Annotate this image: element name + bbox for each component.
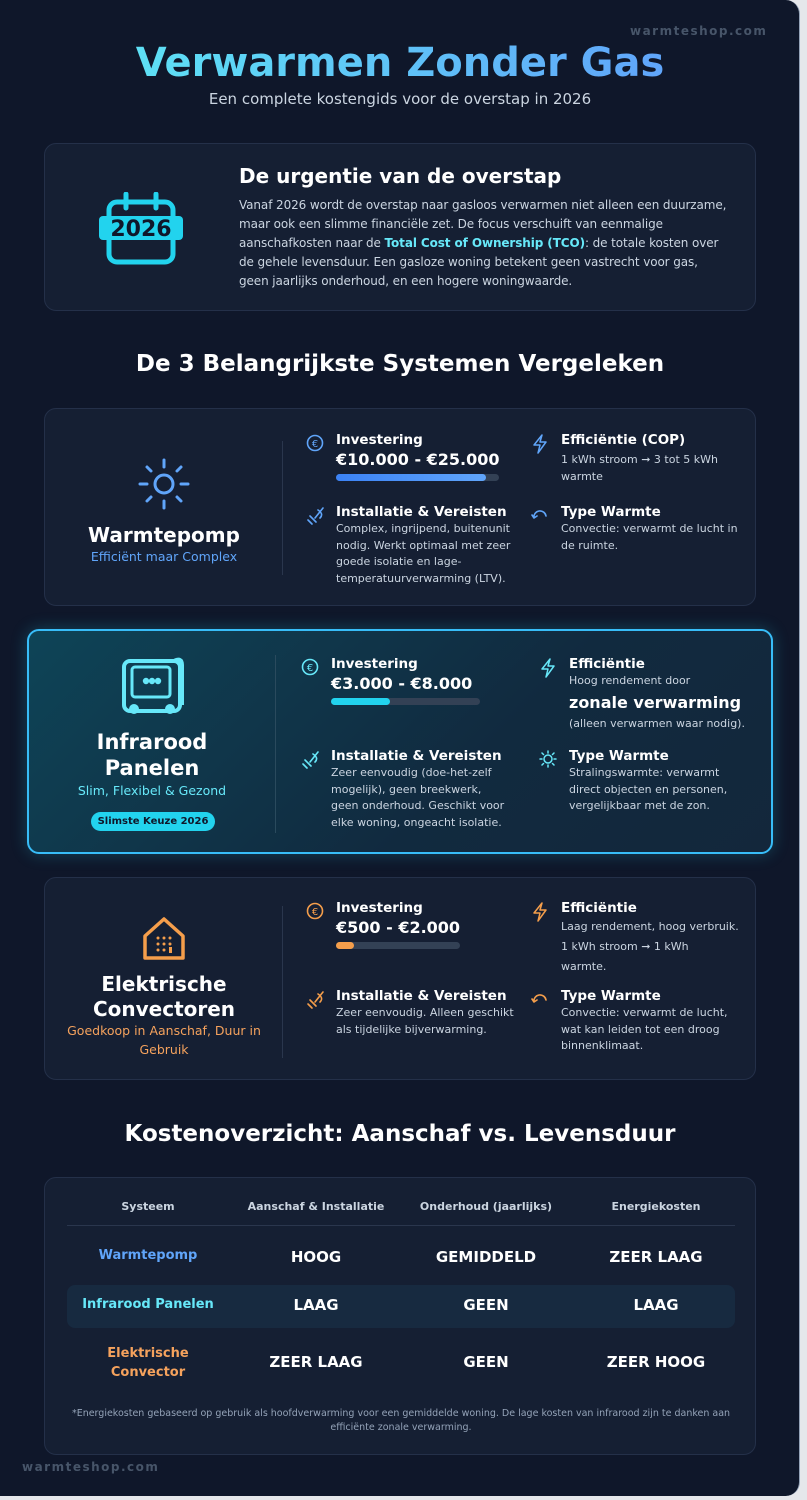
row: warmtepomp: ZEER LAAG: [609, 1248, 703, 1266]
panel: cost table: [44, 1177, 756, 1455]
panel: infrarood panelen (highlight): Stralingswarmte: verwarmt: [569, 766, 719, 779]
row: infrarood (highlight): Infrarood Panelen: [82, 1297, 214, 1312]
panel: infrarood panelen (highlight): Hoog rendement door: [569, 674, 690, 687]
row: warmtepomp: Warmtepomp: [99, 1248, 197, 1263]
panel: elektrische convectoren: als tijdelijke bijverwarming.: [336, 1022, 487, 1036]
row: infrarood (highlight): LAAG: [633, 1296, 679, 1314]
table header: Energiekosten: [611, 1200, 700, 1213]
section heading: systems: De 3 Belangrijkste Systemen Vergeleken: [136, 351, 664, 377]
panel: elektrische convectoren: 1 kWh stroom ➞ 1 kWh: [561, 940, 689, 953]
panel: infrarood panelen (highlight): Efficiëntie: [569, 656, 645, 672]
footnote: *Energiekosten gebaseerd op gebruik als hoofdverwarming voor een gemiddelde woning. De lage kosten van infrarood zijn te danken aan efficiënte zonale verwarming.: [72, 1408, 730, 1433]
watermark bottom: warmteshop.com: [22, 1460, 159, 1474]
item: investering: [306, 432, 500, 481]
panel: infrarood panelen (highlight): Type Warmte: [569, 748, 669, 764]
title: Verwarmen Zonder Gas: [136, 40, 664, 86]
badge: Slimste Keuze 2026: [98, 816, 208, 827]
table header: Systeem: [121, 1200, 175, 1213]
name: [93, 972, 235, 1021]
panel: warmtepomp: Investering: [336, 432, 423, 448]
panel: warmtepomp: €: [312, 439, 318, 450]
row: infrarood (highlight): [67, 1285, 735, 1328]
panel: infrarood panelen (highlight): Installatie & Vereisten: [331, 748, 502, 764]
panel: infrarood panelen (highlight): €: [307, 663, 313, 674]
panel: infrarood panelen (highlight): (alleen verwarmen waar nodig).: [569, 716, 745, 730]
item: type warmte: [531, 504, 738, 552]
icon: calendar 2026: 2026: [110, 217, 172, 242]
panel: warmtepomp: temperatuurverwarming (LTV).: [336, 572, 506, 584]
panel: infrarood panelen (highlight): vergelijkbaar met de zon.: [569, 799, 710, 812]
panel: elektrische convectoren: Investering: [336, 900, 423, 916]
row: convector: ZEER LAAG: [269, 1353, 363, 1371]
panel: infrarood panelen (highlight): elke woning, ongeacht isolatie.: [331, 816, 502, 828]
panel: urgency intro: [44, 143, 756, 311]
row: convector: Elektrische: [107, 1346, 189, 1361]
panel: elektrische convectoren: Convectie: verwarmt de lucht,: [561, 1006, 728, 1019]
watermark top: warmteshop.com: [630, 24, 767, 38]
table header: Aanschaf & Installatie: [248, 1200, 384, 1213]
panel: warmtepomp: Convectie: verwarmt de lucht in: [561, 522, 738, 535]
body text: Vanaf 2026 wordt de overstap naar gasloos verwarmen niet alleen een duurzame, maar ook een slimme financiële zet. De focus verschuift van eenmalige aanschafkosten naar de Total Cost of Ownership (TCO): de totale kosten over de gehele levensduur. Een gasloze woning betekent geen vastrecht voor gas, geen jaarlijks onderhoud, en een hogere woningwaarde.: [239, 198, 726, 288]
panel: infrarood panelen (highlight): direct objecten en personen,: [569, 782, 727, 796]
panel: warmtepomp: goede isolatie en lage-: [336, 555, 461, 568]
panel: elektrische convectoren: warmte.: [561, 960, 606, 973]
row: warmtepomp: [99, 1248, 703, 1266]
tagline: Slim, Flexibel & Gezond: [78, 783, 226, 798]
item: installatie: [307, 988, 514, 1036]
icon: calendar 2026: [99, 192, 183, 264]
panel: warmtepomp: [44, 408, 756, 606]
panel: elektrische convectoren: Type Warmte: [561, 988, 661, 1004]
panel: elektrische convectoren: €: [312, 907, 318, 918]
panel: elektrische convectoren: Installatie & Vereisten: [336, 988, 507, 1004]
table header: [121, 1200, 700, 1213]
row: warmtepomp: HOOG: [291, 1248, 341, 1266]
name: Infrarood: [97, 730, 207, 754]
panel: elektrische convectoren: €500 - €2.000: [336, 918, 460, 937]
item: investering: [302, 656, 480, 705]
panel: warmtepomp: €10.000 - €25.000: [336, 450, 500, 469]
item: type warmte: [531, 988, 728, 1052]
panel: infrarood panelen (highlight): €3.000 - €8.000: [331, 674, 472, 693]
panel: elektrische convectoren: binnenklimaat.: [561, 1039, 643, 1052]
panel: elektrische convectoren: Efficiëntie: [561, 900, 637, 916]
panel: warmtepomp: 1 kWh stroom ➞ 3 tot 5 kWh: [561, 453, 718, 466]
panel: elektrische convectoren: wat kan leiden tot een droog: [561, 1022, 720, 1036]
item: installatie: [302, 748, 504, 828]
item: efficientie: [533, 432, 718, 482]
panel: elektrische convectoren: Laag rendement, hoog verbruik.: [561, 920, 739, 933]
panel: warmtepomp: nodig. Werkt optimaal met zeer: [336, 538, 510, 552]
panel: infrarood panelen (highlight): geen onderhoud. Geschikt voor: [331, 799, 504, 812]
item: investering: [306, 900, 460, 949]
panel: infrarood panelen (highlight): Zeer eenvoudig (doe-het-zelf: [331, 766, 492, 779]
tagline: Efficiënt maar Complex: [91, 549, 237, 564]
name: Elektrische: [101, 972, 227, 996]
panel: elektrische convectoren: [44, 877, 756, 1080]
row: convector: [107, 1346, 705, 1380]
icon: sun: [138, 458, 190, 510]
subtitle: Een complete kostengids voor de overstap in 2026: [209, 90, 591, 108]
panel: infrarood panelen (highlight): mogelijk), geen breekwerk,: [331, 782, 481, 796]
badge: [91, 812, 215, 831]
item: efficientie: [533, 900, 739, 973]
section heading: kostenoverzicht: Kostenoverzicht: Aanschaf vs. Levensduur: [125, 1121, 675, 1147]
row: convector: GEEN: [463, 1353, 509, 1371]
icon: panel: [122, 658, 184, 714]
panel: warmtepomp: Installatie & Vereisten: [336, 504, 507, 520]
row: infrarood (highlight): LAAG: [293, 1296, 339, 1314]
row: convector: Convector: [111, 1365, 185, 1380]
icon: house: [143, 917, 185, 960]
item: efficientie: [541, 656, 745, 730]
panel: infrarood panelen (highlight): Investering: [331, 656, 418, 672]
panel: infrarood panelen (highlight): [27, 629, 773, 854]
panel: warmtepomp: Type Warmte: [561, 504, 661, 520]
name: Convectoren: [93, 997, 235, 1021]
panel: elektrische convectoren: Zeer eenvoudig. Alleen geschikt: [336, 1006, 514, 1019]
name: [97, 730, 207, 780]
row: infrarood (highlight): GEEN: [463, 1296, 509, 1314]
panel: warmtepomp: Efficiëntie (COP): [561, 432, 685, 448]
tagline: Goedkoop in Aanschaf, Duur in Gebruik: [67, 1023, 261, 1057]
table header: Onderhoud (jaarlijks): [420, 1200, 552, 1213]
row: convector: ZEER HOOG: [607, 1353, 705, 1371]
row: warmtepomp: GEMIDDELD: [436, 1248, 536, 1266]
item: type warmte: [539, 748, 727, 812]
name: Warmtepomp: [88, 523, 240, 547]
panel: warmtepomp: de ruimte.: [561, 538, 618, 552]
item: installatie: [307, 504, 510, 584]
panel: warmtepomp: warmte: [561, 470, 603, 482]
panel: infrarood panelen (highlight): zonale verwarming: [569, 692, 741, 712]
name: Panelen: [105, 756, 199, 780]
heading: De urgentie van de overstap: [239, 164, 561, 188]
panel: warmtepomp: Complex, ingrijpend, buitenunit: [336, 522, 510, 535]
